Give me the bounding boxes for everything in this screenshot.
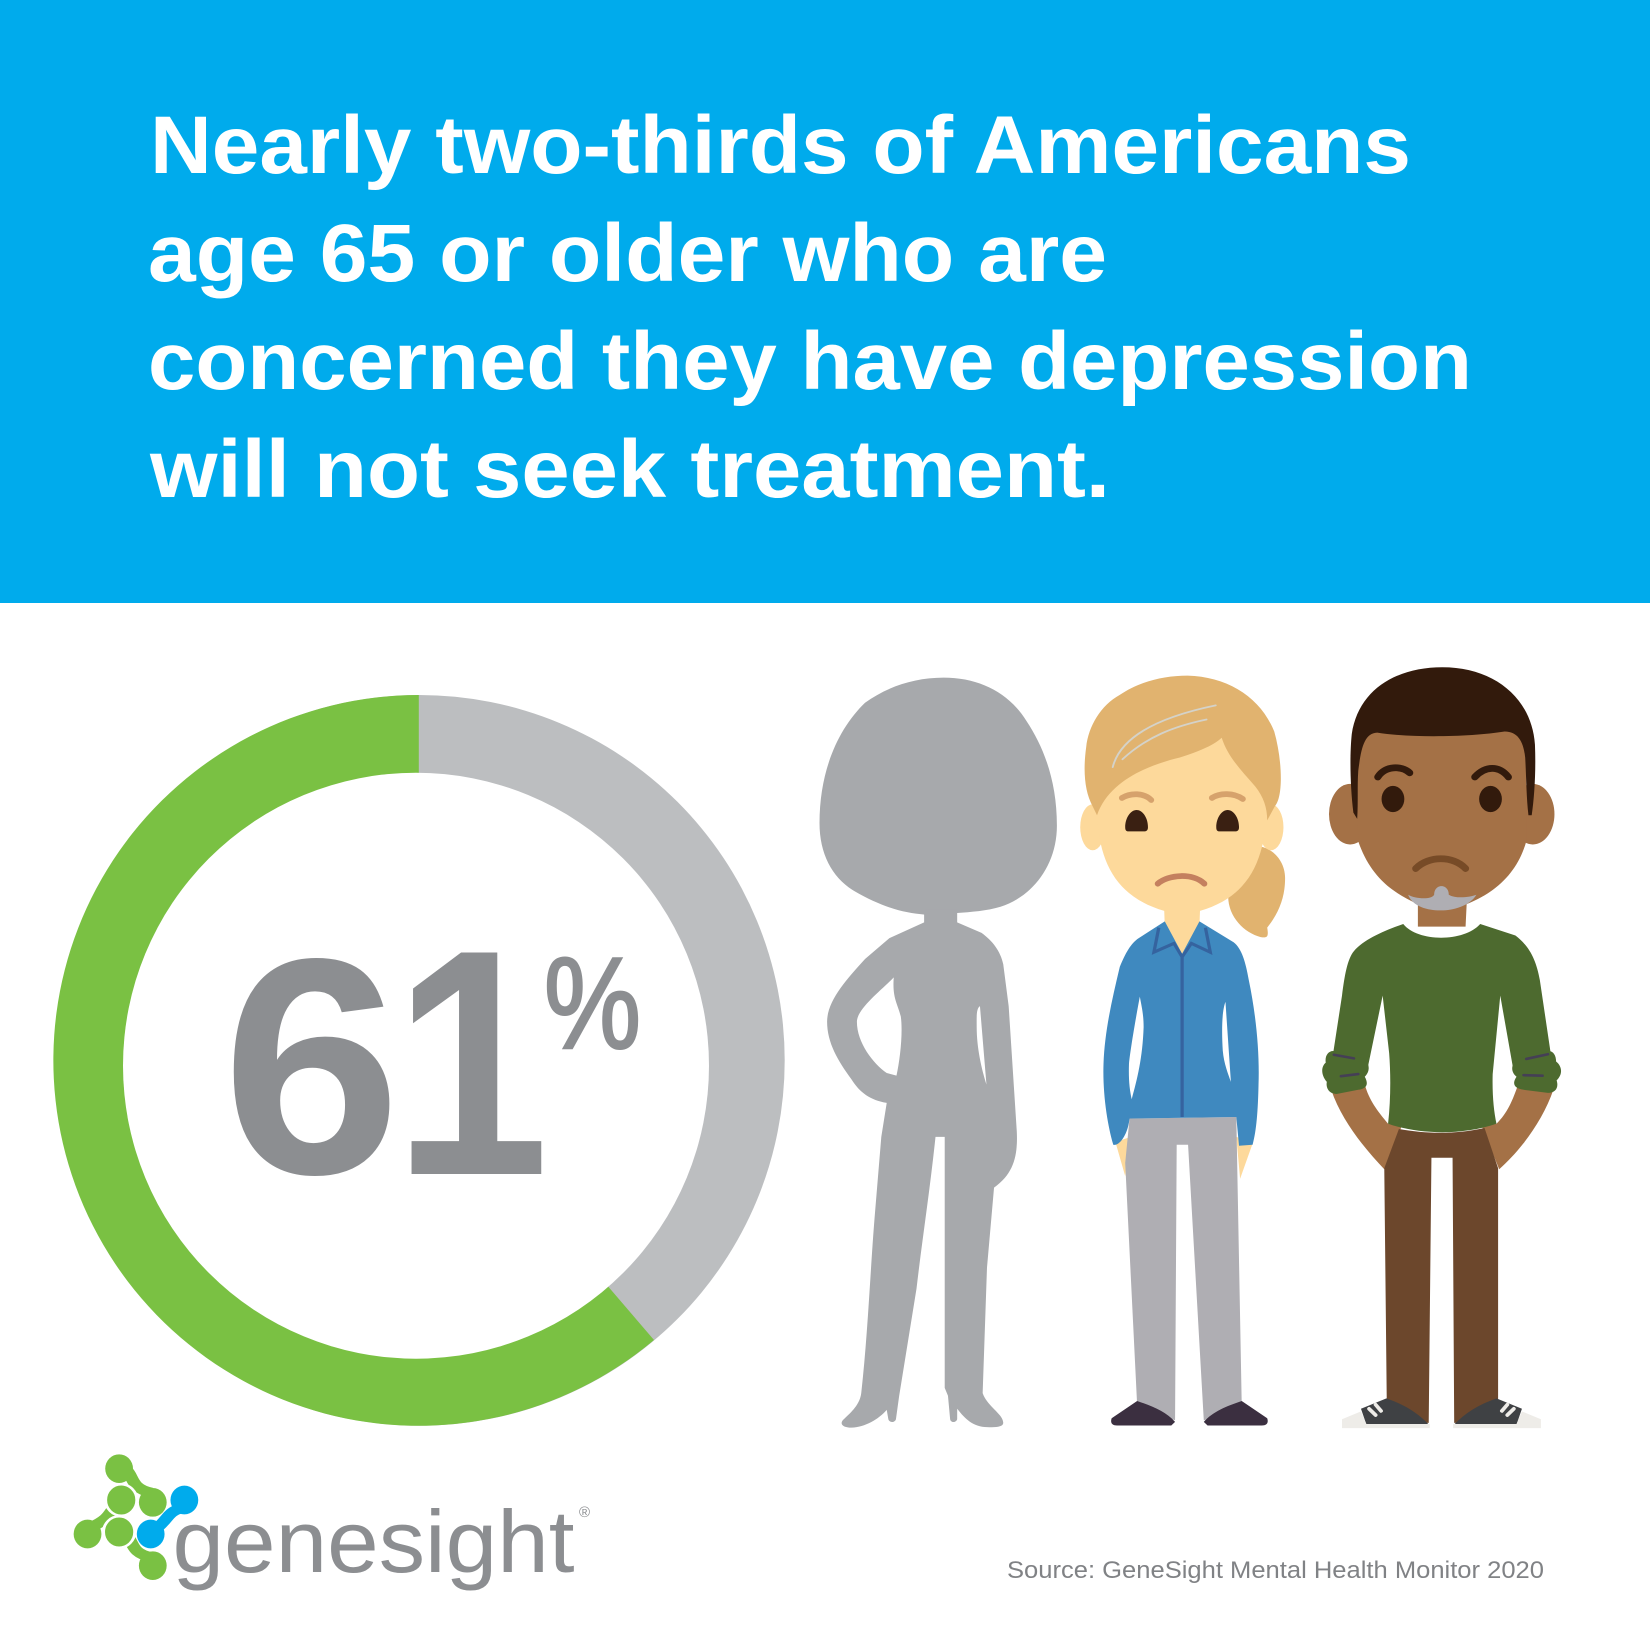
person: man with goatee xyxy=(1322,667,1561,1428)
person: blonde woman xyxy=(1080,676,1285,1426)
GeneSight logo xyxy=(74,1454,590,1591)
title: will not seek treatment. xyxy=(149,424,1110,515)
logo wordmark: genesight xyxy=(172,1492,574,1591)
big number 61 percent: % xyxy=(544,930,641,1076)
registered mark: ® xyxy=(579,1504,590,1521)
header banner xyxy=(0,0,1650,603)
icon: logo molecule dots xyxy=(74,1454,198,1580)
title xyxy=(148,100,1472,515)
big number 61 percent: 6 xyxy=(222,895,401,1239)
donut chart: 61 percent xyxy=(53,695,785,1426)
big number 61 percent: 1 xyxy=(394,884,549,1243)
person: grey silhouette xyxy=(820,678,1057,1428)
illustration: three people xyxy=(820,667,1561,1428)
title: age 65 or older who are xyxy=(148,208,1107,299)
title: Nearly two-thirds of Americans xyxy=(150,100,1411,191)
source note: Source: GeneSight Mental Health Monitor 2020 xyxy=(1007,1557,1544,1584)
big number 61 percent xyxy=(222,884,641,1243)
title: concerned they have depression xyxy=(148,316,1472,407)
